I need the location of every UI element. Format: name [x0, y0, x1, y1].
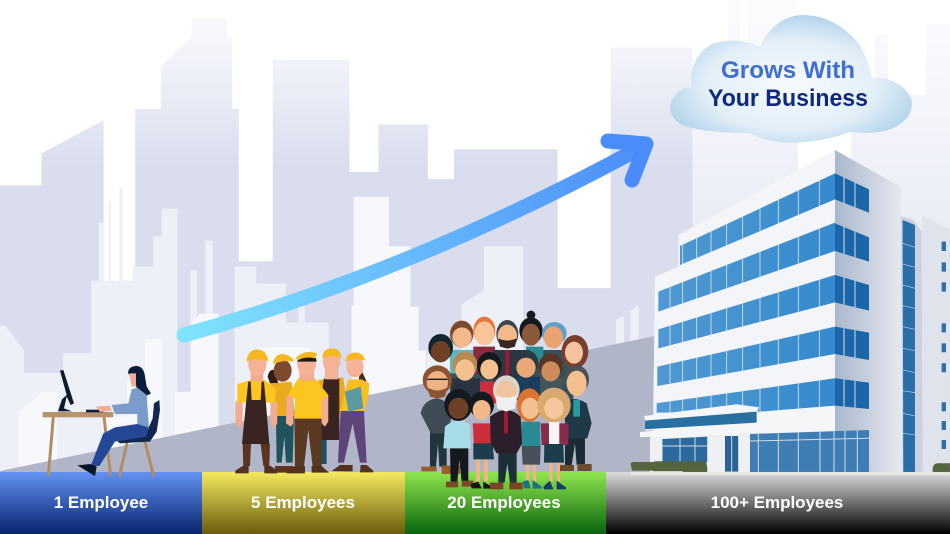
front row: woman in red top: [469, 392, 494, 489]
desk: [43, 412, 154, 477]
five employees group: [235, 348, 373, 473]
front row: woman in teal top: [517, 388, 542, 489]
grey ground slope: [0, 336, 655, 480]
computer monitor: [58, 370, 74, 411]
office worker at desk: [43, 366, 160, 477]
employee 4 apron: [318, 348, 347, 464]
growth arrow: [184, 141, 646, 335]
tier bar: 100+ employees: [606, 472, 950, 534]
glass stair tower: [901, 216, 923, 473]
employee 1 with apron: [235, 349, 277, 473]
entrance canopy: [640, 404, 760, 437]
tier bar: 20 employees: 20 Employees: [447, 493, 561, 512]
tier bar: 5 employees: [202, 472, 405, 534]
columns: [650, 433, 750, 473]
employee 2: [268, 354, 295, 473]
front window bands: [657, 173, 835, 413]
hedges: [631, 461, 950, 473]
front row: man with white beard: [490, 375, 523, 489]
ground-floor glazing: [750, 430, 869, 473]
front row: blonde woman in cardigan: [537, 388, 571, 489]
building side wall: [835, 150, 903, 473]
office building: [630, 150, 950, 475]
cloud heading: Grows With: [721, 57, 855, 84]
back row faces: [428, 311, 588, 368]
person with glasses on left: [421, 365, 460, 474]
chair: [117, 400, 160, 443]
pavement: [630, 472, 950, 475]
employee 5 with clipboard: [332, 353, 373, 472]
tier bar: 5 employees: 5 Employees: [251, 493, 355, 512]
tier bar: 20 employees: [405, 472, 606, 534]
employee 3: [286, 352, 329, 473]
middle row: [452, 350, 563, 410]
cloud callout: Your Business: [708, 85, 868, 112]
front row: man in blue sweater: [443, 389, 473, 487]
tier bar: 1 employee: 1 Employee: [54, 493, 148, 512]
person in teal suit on right: [560, 365, 592, 471]
building front facade: [650, 150, 835, 473]
tier bar: 1 employee: [0, 472, 202, 534]
back row bodies: [450, 350, 573, 400]
cloud callout: [670, 15, 912, 143]
seated woman: [77, 366, 151, 476]
side window bands: [835, 173, 869, 409]
twenty employees group: [421, 311, 592, 489]
tier bar: 100+ employees: 100+ Employees: [711, 493, 843, 512]
right wing: [922, 216, 950, 473]
